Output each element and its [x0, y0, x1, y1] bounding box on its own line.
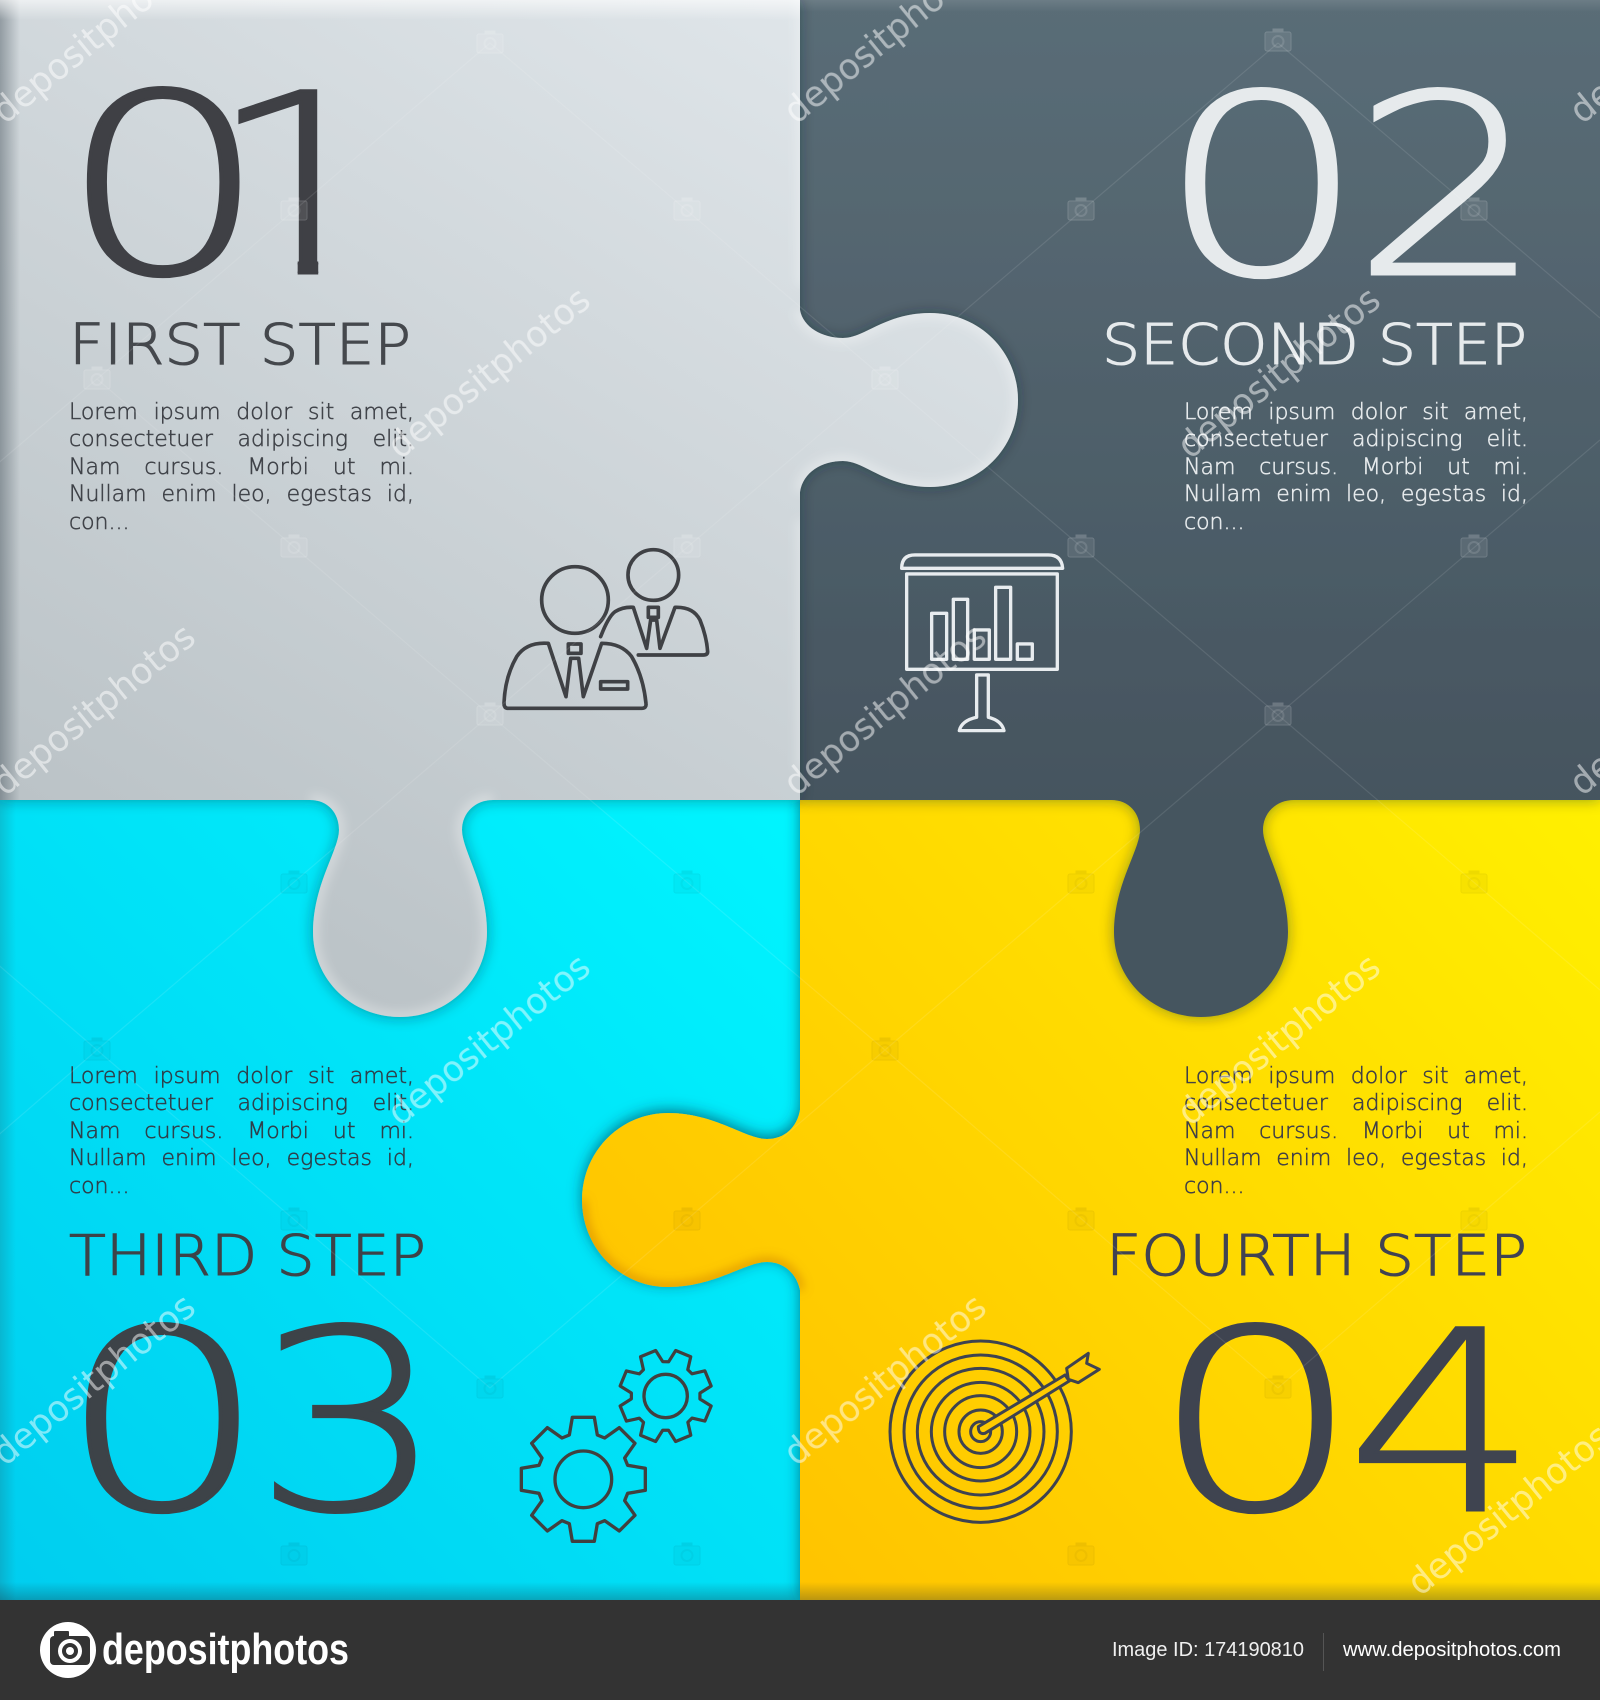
- number 04: 4: [1346, 1278, 1539, 1569]
- watermark: depositphotos diagonal text: depositphotos: [1170, 279, 1388, 467]
- text block: second step body: con...: [1184, 510, 1244, 535]
- heading: third step: THIRD STEP: [69, 1224, 426, 1289]
- text block: second step body: Nam cursus. Morbi ut mi.: [1184, 455, 1528, 480]
- icon: gears: [521, 1336, 726, 1541]
- text block: first step body: Nam cursus. Morbi ut mi.: [69, 455, 414, 480]
- number 02: 2: [1352, 42, 1544, 333]
- number 02: 0: [1158, 42, 1366, 333]
- text block: third step body: [69, 1064, 414, 1199]
- heading: first step: FIRST STEP: [69, 313, 411, 378]
- text block: third step body: Nam cursus. Morbi ut mi.: [69, 1119, 414, 1144]
- text block: first step body: [69, 400, 414, 535]
- logo wordmark: depositphotos: [102, 1625, 349, 1674]
- text block: fourth step body: Lorem ipsum dolor sit amet,: [1184, 1064, 1528, 1089]
- watermark: depositphotos diagonal text: depositphotos: [1170, 946, 1388, 1134]
- icon: target with arrow: [890, 1341, 1099, 1522]
- number 04: [1152, 1277, 1539, 1569]
- text block: fourth step body: con...: [1184, 1174, 1244, 1199]
- watermark: camera marks: [84, 29, 1487, 1565]
- text block: third step body: consectetuer adipiscing elit.: [69, 1091, 414, 1116]
- text block: second step body: Nullam enim leo, egestas id,: [1184, 482, 1528, 507]
- heading: fourth step: FOURTH STEP: [1106, 1224, 1527, 1289]
- watermark: faint diagonal lattice: [0, 43, 1600, 1388]
- panel: first step gray puzzle piece: [0, 0, 1018, 1017]
- number 01: 0: [60, 41, 268, 332]
- number 03: 0: [59, 1277, 267, 1568]
- number 03: [59, 1277, 445, 1568]
- number 03: 3: [253, 1277, 445, 1568]
- text block: third step body: Lorem ipsum dolor sit amet,: [69, 1064, 414, 1089]
- watermark: depositphotos diagonal text: depositphotos: [776, 1286, 994, 1474]
- text block: fourth step body: Nam cursus. Morbi ut mi.: [1184, 1119, 1528, 1144]
- number 01: [86, 86, 318, 278]
- number 01: 1: [207, 41, 399, 332]
- text block: second step body: Lorem ipsum dolor sit amet,: [1184, 400, 1528, 425]
- image id: Image ID: 174190810: [1112, 1639, 1304, 1661]
- text block: fourth step body: Nullam enim leo, egestas id,: [1184, 1146, 1528, 1171]
- panel: fourth step yellow puzzle piece: [582, 800, 1600, 1600]
- heading: second step: SECOND STEP: [1102, 313, 1527, 378]
- text block: first step body: Lorem ipsum dolor sit amet,: [69, 400, 414, 425]
- watermark: depositphotos diagonal text: depositphotos: [776, 616, 994, 804]
- watermark: depositphotos diagonal text: depositphotos: [380, 279, 598, 467]
- text block: second step body: consectetuer adipiscing elit.: [1184, 427, 1528, 452]
- text block: first step body: consectetuer adipiscing elit.: [69, 427, 414, 452]
- website url: www.depositphotos.com: [1342, 1639, 1561, 1661]
- panel: second step dark puzzle piece: [800, 0, 1600, 1017]
- text block: first step body: Nullam enim leo, egestas id,: [69, 482, 414, 507]
- text block: third step body: Nullam enim leo, egestas id,: [69, 1146, 414, 1171]
- text block: third step body: con...: [69, 1174, 129, 1199]
- icon: depositphotos logo: [40, 1622, 96, 1678]
- text block: fourth step body: consectetuer adipiscing elit.: [1184, 1091, 1528, 1116]
- icon: business people: [504, 550, 708, 708]
- text block: second step body: [1184, 400, 1528, 535]
- icon: presentation board with bar chart: [902, 555, 1063, 731]
- watermark: depositphotos diagonal text: depositphotos: [380, 946, 598, 1134]
- text block: first step body: con...: [69, 510, 129, 535]
- footer bar: [0, 1600, 1600, 1700]
- number 04: 0: [1152, 1277, 1360, 1568]
- panel: third step cyan puzzle piece: [0, 800, 800, 1600]
- number 02: [1158, 42, 1544, 333]
- text block: fourth step body: [1184, 1064, 1528, 1199]
